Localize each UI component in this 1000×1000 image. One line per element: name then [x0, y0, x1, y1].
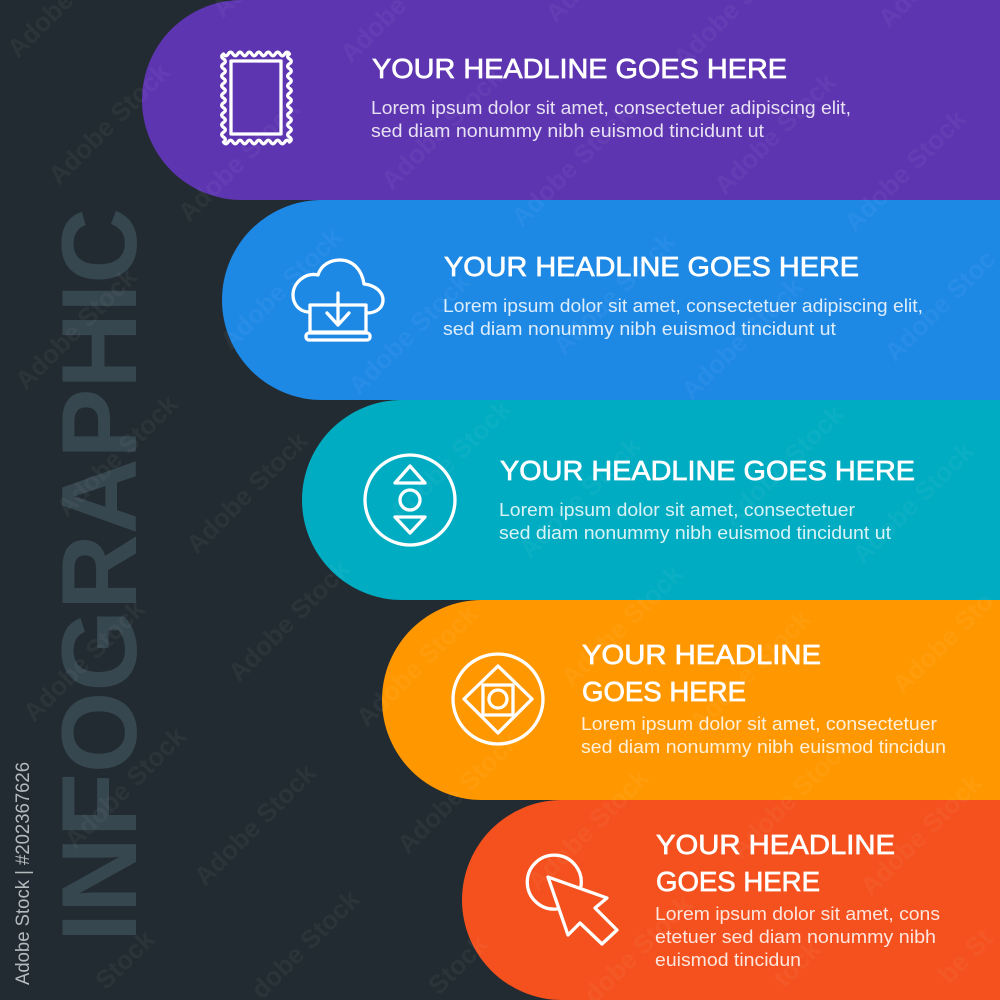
body text 1: sed diam nonummy nibh euismod tincidunt ut	[371, 121, 764, 141]
body text 1: Lorem ipsum dolor sit amet, consectetuer adipiscing elit,	[371, 98, 851, 118]
headline 5	[656, 829, 895, 897]
icon: cloud download laptop	[293, 260, 383, 340]
stock watermark overlay: Adobe Stock	[675, 271, 809, 405]
stock watermark overlay: Adobe Stock	[724, 730, 858, 864]
icon: up down control	[365, 455, 455, 545]
headline 5: YOUR HEADLINE	[656, 829, 895, 860]
body text 3: Lorem ipsum dolor sit amet, consectetuer	[499, 500, 855, 520]
headline 4: YOUR HEADLINE	[582, 639, 821, 670]
stock watermark overlay: Adobe Stock	[9, 261, 143, 395]
body text 4: sed diam nonummy nibh euismod tincidun	[581, 737, 946, 757]
stock watermark overlay: Adobe Stock	[383, 393, 517, 527]
band 5	[462, 800, 1000, 1000]
band 2	[222, 200, 1000, 400]
headline 5: GOES HERE	[656, 866, 820, 897]
panel: step 2 blue	[222, 200, 1000, 400]
panel: step 5 red orange	[462, 800, 1000, 1000]
stock watermark overlay: Adobe Stock	[188, 757, 322, 891]
stock watermark overlay: Adobe Stock	[222, 553, 356, 687]
stock watermark overlay: Adobe Stock	[555, 558, 689, 692]
icon: four way control	[453, 654, 543, 744]
stock watermark overlay: Adobe Stock	[846, 435, 980, 569]
stock watermark overlay: Adobe Stock	[683, 603, 817, 737]
headline 3: YOUR HEADLINE GOES HERE	[500, 455, 915, 486]
stock credit: Adobe Stock | #202367626	[13, 762, 34, 985]
panel: step 4 orange	[382, 600, 1000, 800]
band 1	[142, 0, 1000, 200]
stock watermark overlay: Adobe Stock	[180, 425, 314, 559]
icon: postage stamp	[222, 52, 291, 144]
stock watermark overlay: Adobe Stock	[547, 226, 681, 360]
stock watermark overlay: Adobe Stock	[391, 725, 525, 859]
body text 5	[655, 904, 940, 970]
stock watermark overlay: Adobe Stoc	[878, 244, 1000, 367]
stock watermark overlay: Adobe Stock	[708, 66, 842, 200]
body text 2	[443, 296, 923, 339]
stock watermark overlay: be St	[932, 923, 998, 989]
stock watermark overlay: Adobe Stock	[854, 767, 988, 901]
headline 4	[582, 639, 821, 707]
body text 2: Lorem ipsum dolor sit amet, consectetuer adipiscing elit,	[443, 296, 923, 316]
stock watermark overlay: Adobe Stock	[214, 221, 348, 355]
stock watermark overlay: Adobe Stock	[716, 398, 850, 532]
stock watermark overlay: Adobe Stock	[375, 61, 509, 195]
body text 3	[499, 500, 891, 543]
body text 5: etetuer sed diam nonummy nibh	[655, 927, 936, 947]
stock watermark overlay: Adobe Stock	[50, 388, 184, 522]
body text 4	[581, 714, 946, 757]
band 4	[382, 600, 1000, 800]
stock watermark overlay: Adobe Stock	[58, 720, 192, 854]
body text 1	[371, 98, 851, 141]
icon: cursor click	[527, 855, 617, 944]
body text 5: euismod tincidun	[655, 950, 801, 970]
headline 1: YOUR HEADLINE GOES HERE	[372, 53, 787, 84]
stock watermark overlay: Stock	[89, 924, 161, 995]
stock watermark overlay: Stock	[422, 929, 494, 1000]
band 3	[302, 400, 1000, 600]
body text 2: sed diam nonummy nibh euismod tincidunt ut	[443, 319, 836, 339]
stock watermark overlay: Adobe Stock	[521, 762, 655, 896]
stock watermark overlay: Adobe Stock	[513, 430, 647, 564]
stock watermark overlay: Adobe Stock	[17, 593, 151, 727]
stock watermark overlay: Adobe Stock	[342, 266, 476, 400]
panel: step 1 purple	[142, 0, 1000, 200]
body text 3: sed diam nonummy nibh euismod tincidunt ut	[499, 523, 891, 543]
body text 4: Lorem ipsum dolor sit amet, consectetuer	[581, 714, 937, 734]
stock watermark overlay: Adobe Stock	[838, 103, 972, 237]
stock watermark overlay: Adobe Sto	[886, 586, 999, 699]
stock watermark overlay: Adobe Stock	[350, 598, 484, 732]
stock watermark overlay: tock	[767, 934, 827, 993]
stock watermark overlay: Adobe Stock	[505, 98, 639, 232]
headline 2: YOUR HEADLINE GOES HERE	[444, 251, 859, 282]
body text 5: Lorem ipsum dolor sit amet, cons	[655, 904, 940, 924]
headline 4: GOES HERE	[582, 676, 746, 707]
vertical title: INFOGRAPHIC	[39, 208, 159, 942]
stock watermark overlay: Adobe Stock	[172, 93, 306, 227]
panel: step 3 teal	[302, 400, 1000, 600]
stock watermark overlay: Adobe Stock	[42, 56, 176, 190]
